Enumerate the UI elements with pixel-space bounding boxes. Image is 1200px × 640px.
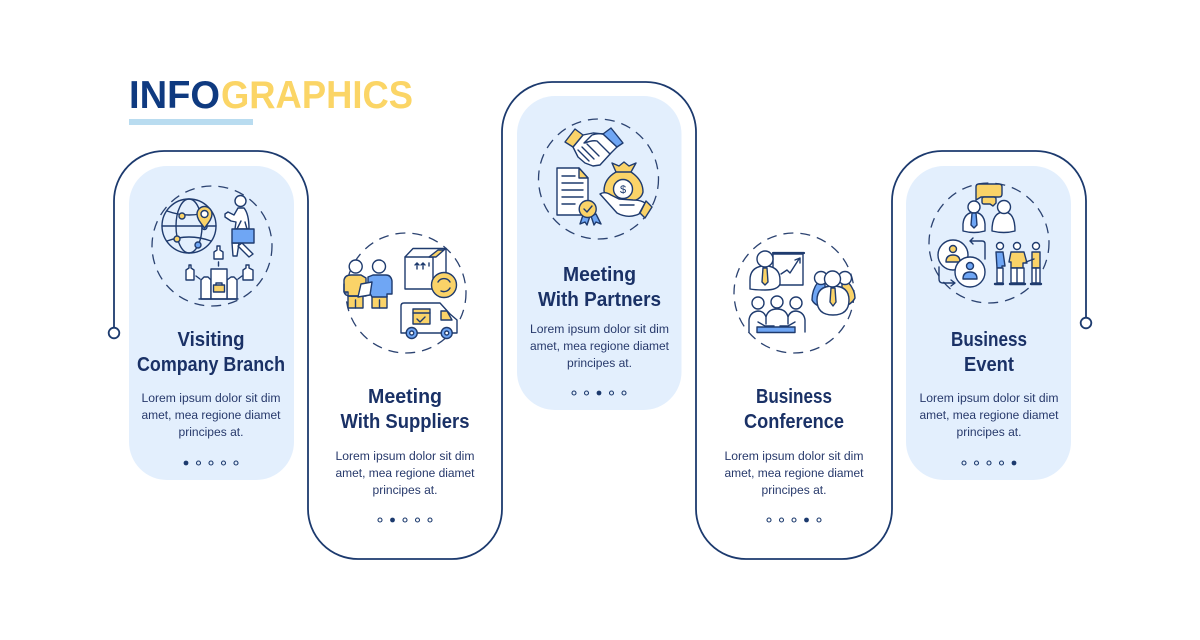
panel: business event bbox=[920, 183, 1059, 465]
body text: Lorem ipsum dolor sit dim bbox=[920, 391, 1058, 405]
body text: principes at. bbox=[956, 425, 1022, 439]
icon: people, parcel and delivery van bbox=[344, 233, 466, 353]
body text: principes at. bbox=[567, 356, 632, 370]
body text: Lorem ipsum dolor sit dim bbox=[530, 322, 669, 336]
body text: Lorem ipsum dolor sit dim bbox=[142, 391, 280, 405]
heading bbox=[744, 386, 844, 433]
icon: globe, traveller and branch offices bbox=[152, 186, 272, 306]
body text bbox=[530, 322, 670, 370]
heading bbox=[340, 386, 470, 433]
pagination dots bbox=[572, 391, 626, 395]
title bbox=[129, 74, 413, 117]
heading: With Suppliers bbox=[340, 411, 470, 433]
icon: handshake, contract and money bag bbox=[538, 119, 658, 239]
body text bbox=[724, 449, 864, 497]
title underline bbox=[129, 119, 253, 125]
title: GRAPHICS bbox=[221, 74, 413, 117]
pagination dots bbox=[378, 518, 432, 522]
body text: principes at. bbox=[372, 483, 438, 497]
panel backgrounds bbox=[129, 96, 1071, 480]
panel: business conference bbox=[724, 233, 864, 522]
icon: presenter, delegates and audience bbox=[734, 233, 855, 353]
pagination dots bbox=[184, 461, 238, 465]
body text: Lorem ipsum dolor sit dim bbox=[724, 449, 864, 463]
heading: Business bbox=[756, 386, 832, 408]
body text: amet, mea regione diamet bbox=[142, 408, 281, 422]
body text: amet, mea regione diamet bbox=[530, 339, 670, 353]
body text bbox=[336, 449, 475, 497]
body text bbox=[142, 391, 281, 439]
body text: amet, mea regione diamet bbox=[724, 466, 864, 480]
heading: Conference bbox=[744, 411, 844, 433]
icon: conversation, networking and guests bbox=[929, 183, 1049, 303]
body text: principes at. bbox=[178, 425, 244, 439]
panel: meeting with suppliers bbox=[336, 233, 475, 522]
panel: visiting company branch bbox=[137, 186, 285, 465]
panel: meeting with partners bbox=[530, 119, 670, 395]
heading bbox=[951, 329, 1027, 376]
body text bbox=[920, 391, 1059, 439]
heading: Business bbox=[951, 329, 1027, 351]
right end marker bbox=[1081, 318, 1091, 328]
heading bbox=[137, 329, 285, 376]
body text: Lorem ipsum dolor sit dim bbox=[336, 449, 474, 463]
body text: amet, mea regione diamet bbox=[336, 466, 475, 480]
connecting outline bbox=[114, 82, 1086, 559]
heading: Company Branch bbox=[137, 354, 285, 376]
icon: handshake, contract and money bag: $ bbox=[620, 184, 626, 196]
heading: Visiting bbox=[178, 329, 244, 351]
left end marker bbox=[109, 328, 119, 338]
body text: amet, mea regione diamet bbox=[920, 408, 1059, 422]
heading: With Partners bbox=[538, 289, 661, 311]
body text: principes at. bbox=[762, 483, 826, 497]
heading: Event bbox=[964, 354, 1014, 376]
heading: Meeting bbox=[368, 386, 442, 408]
heading: Meeting bbox=[563, 264, 636, 286]
pagination dots bbox=[767, 518, 821, 522]
heading bbox=[538, 264, 661, 311]
pagination dots bbox=[962, 461, 1016, 465]
title: INFO bbox=[129, 74, 220, 117]
